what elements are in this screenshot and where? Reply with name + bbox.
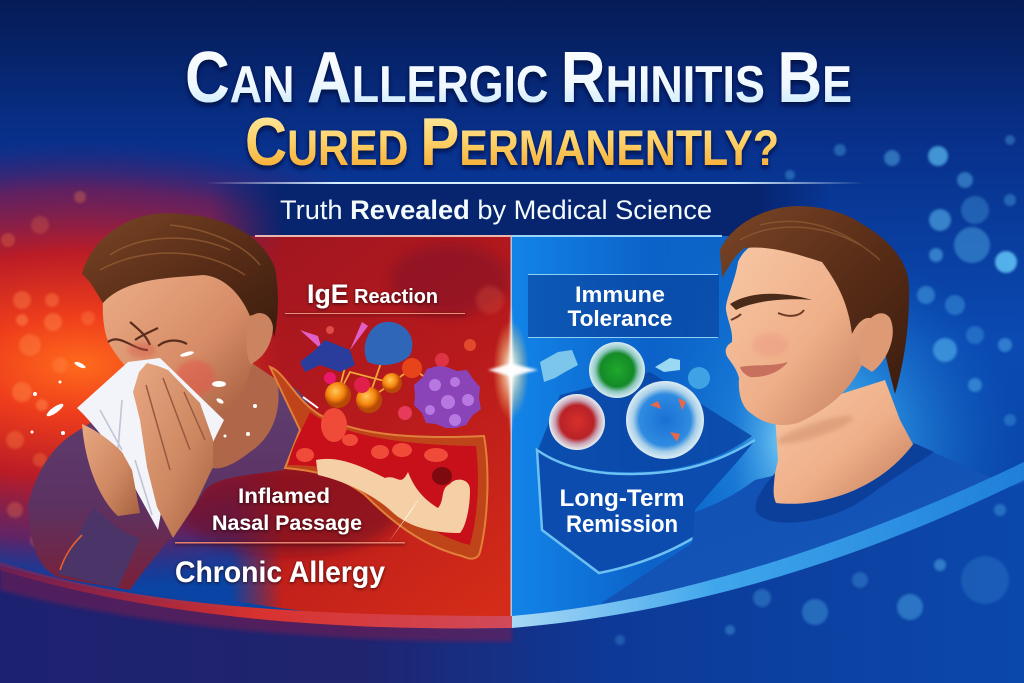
label: long-term remission: Remission bbox=[566, 511, 678, 538]
title: CAN ALLERGIC RHINITIS BE bbox=[185, 38, 852, 118]
tissue bbox=[77, 358, 224, 530]
panel: red allergy side bbox=[180, 235, 512, 622]
subtitle banner: Truth Revealed by Medical Science bbox=[280, 195, 712, 225]
right hand bbox=[133, 363, 213, 538]
label: long-term remission: Long-Term bbox=[560, 485, 684, 512]
subtitle banner bbox=[205, 182, 865, 236]
label: inflamed nasal passage bbox=[175, 485, 405, 544]
t-shirt bbox=[600, 443, 1024, 604]
title: CURED PERMANENTLY? bbox=[245, 104, 779, 180]
label: long-term remission bbox=[537, 440, 755, 573]
neck bbox=[772, 380, 915, 506]
collar bbox=[756, 443, 934, 523]
label: chronic allergy: Chronic Allergy bbox=[175, 556, 385, 589]
mucus bbox=[316, 459, 470, 533]
head bbox=[103, 258, 261, 411]
purple allergen bbox=[414, 366, 481, 428]
label: inflamed nasal passage: Inflamed bbox=[238, 485, 330, 508]
neck bbox=[200, 355, 279, 468]
hair bbox=[82, 213, 278, 338]
label: IgE reaction: IgE Reaction bbox=[307, 279, 438, 309]
relaxed man bbox=[600, 206, 1024, 604]
nasal passage illustration bbox=[270, 367, 487, 559]
ear bbox=[858, 313, 893, 372]
panel: blue relief side bbox=[510, 235, 790, 622]
man sneezing bbox=[28, 213, 313, 590]
blue allergen bbox=[365, 322, 412, 365]
left hand bbox=[82, 424, 140, 516]
ear bbox=[246, 313, 273, 364]
label: immune tolerance: Tolerance bbox=[568, 306, 672, 331]
label: immune tolerance: Immune bbox=[575, 282, 665, 307]
title bbox=[185, 38, 852, 180]
central sparkle bbox=[488, 305, 538, 435]
inflamed tissue bbox=[288, 412, 478, 545]
bokeh: red bbox=[1, 191, 499, 609]
immune cells: allergy bbox=[300, 322, 481, 428]
dark blue allergen bbox=[300, 340, 355, 372]
swoosh band bbox=[0, 462, 1024, 628]
closed eyes and wrinkles bbox=[108, 322, 187, 350]
label: immune tolerance bbox=[528, 274, 719, 338]
head bbox=[726, 235, 880, 425]
hair bbox=[720, 206, 909, 394]
smile bbox=[740, 362, 788, 377]
droplets bbox=[30, 350, 257, 438]
outer wall bbox=[270, 367, 487, 559]
bokeh: blue bbox=[615, 135, 1017, 645]
sweater bbox=[28, 378, 313, 590]
immune cells: tolerance bbox=[537, 342, 752, 472]
brow and closed eye bbox=[730, 294, 812, 310]
sleeve bbox=[58, 508, 140, 588]
label: inflamed nasal passage: Nasal Passage bbox=[212, 512, 362, 535]
